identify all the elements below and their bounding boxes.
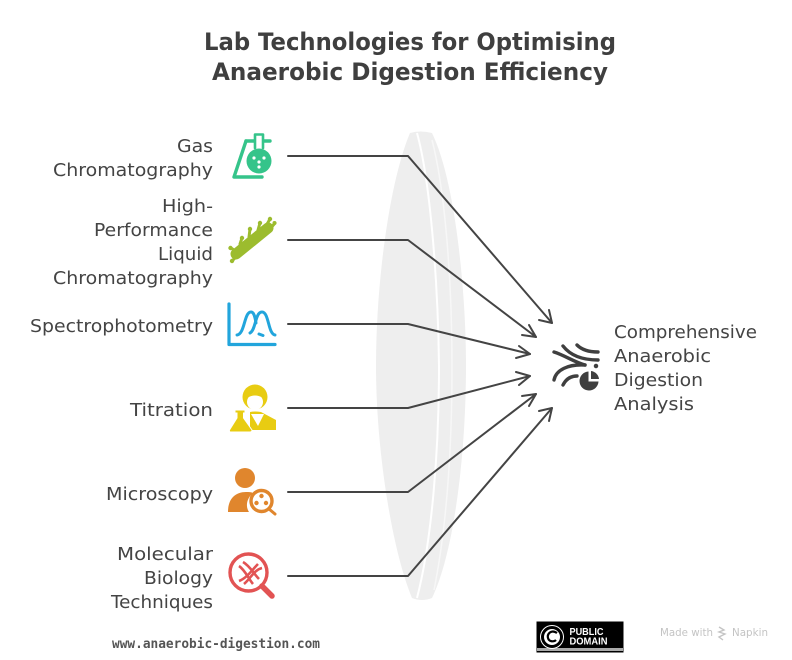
label: gas chromatography: Chromatography bbox=[53, 160, 213, 181]
title: Lab Technologies for Optimising bbox=[204, 28, 616, 56]
connector arrows bbox=[288, 156, 552, 576]
label: molecular biology techniques: Molecular bbox=[117, 544, 214, 565]
public domain badge bbox=[537, 622, 623, 652]
label: spectrophotometry: Spectrophotometry bbox=[30, 316, 213, 337]
label: HPLC: High- bbox=[162, 196, 213, 217]
label: molecular biology techniques: Biology bbox=[144, 568, 213, 589]
label: outcome: Comprehensive bbox=[614, 322, 757, 343]
arrow: microscopy bbox=[288, 394, 536, 492]
icon: chromatography column bbox=[228, 217, 276, 263]
public domain badge: DOMAIN bbox=[570, 636, 608, 648]
icon: scientist with flask bbox=[229, 384, 276, 432]
title: Anaerobic Digestion Efficiency bbox=[212, 58, 608, 86]
label: HPLC: Liquid bbox=[158, 244, 213, 265]
Napkin watermark bbox=[660, 626, 768, 640]
Napkin watermark: Made with bbox=[660, 626, 713, 639]
website link text: www.anaerobic-digestion.com bbox=[112, 637, 320, 652]
label: titration: Titration bbox=[129, 400, 213, 421]
label: microscopy: Microscopy bbox=[106, 484, 213, 505]
icon: DNA magnifier bbox=[230, 554, 272, 596]
arrow: molecular biology bbox=[288, 408, 552, 576]
label: outcome bbox=[614, 322, 757, 415]
label: outcome: Analysis bbox=[614, 394, 694, 415]
arrow: titration bbox=[288, 372, 530, 408]
label: outcome: Digestion bbox=[614, 370, 703, 391]
icon: person with magnifier bbox=[228, 468, 275, 514]
arrow: spectrophotometry bbox=[288, 324, 530, 358]
icon: spectrum peaks chart bbox=[229, 304, 275, 344]
label: HPLC bbox=[53, 196, 213, 289]
Napkin watermark: Napkin bbox=[732, 626, 768, 639]
title bbox=[204, 28, 616, 86]
funnel lens shape bbox=[376, 132, 466, 600]
label: outcome: Anaerobic bbox=[614, 346, 711, 367]
icon: flask on stand bbox=[234, 134, 272, 177]
label: HPLC: Chromatography bbox=[53, 268, 213, 289]
label: HPLC: Performance bbox=[94, 220, 213, 241]
label: gas chromatography: Gas bbox=[177, 136, 213, 157]
label: molecular biology techniques: Techniques bbox=[110, 592, 213, 613]
arrow: HPLC bbox=[288, 240, 536, 337]
label: gas chromatography bbox=[53, 136, 213, 181]
label: molecular biology techniques bbox=[110, 544, 214, 613]
public domain badge: PUBLIC bbox=[570, 627, 604, 638]
icon: analysis streams with pie bbox=[554, 345, 599, 390]
arrow: gas chromatography bbox=[288, 156, 552, 323]
